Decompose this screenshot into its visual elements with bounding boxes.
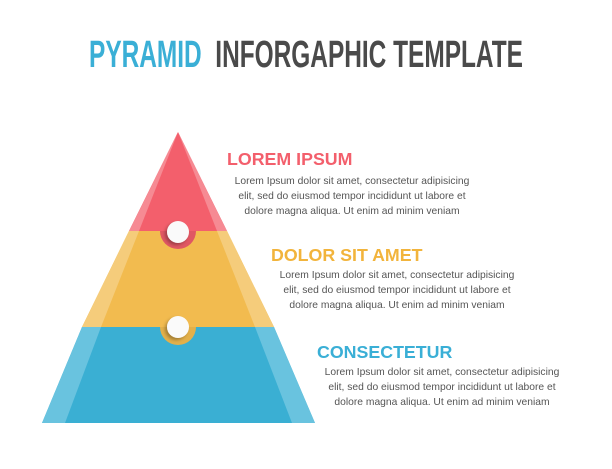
connector: yellow notch	[160, 316, 196, 345]
text block 3: Lorem Ipsum dolor sit amet, consectetur adipisicing	[325, 367, 559, 378]
text block 1: dolore magna aliqua. Ut enim ad minim veniam	[244, 206, 460, 217]
title: PYRAMID INFORGAPHIC TEMPLATE	[89, 34, 523, 76]
text block 3: dolore magna aliqua. Ut enim ad minim veniam	[334, 397, 550, 408]
heading: lorem ipsum: LOREM IPSUM	[227, 149, 352, 169]
text block 2: elit, sed do eiusmod tempor incididunt ut labore et	[283, 285, 511, 296]
text block 3: elit, sed do eiusmod tempor incididunt ut labore et	[328, 382, 556, 393]
text block 2	[280, 270, 514, 311]
layer: yellow middle	[82, 231, 274, 327]
text block 1: elit, sed do eiusmod tempor incididunt ut labore et	[238, 191, 466, 202]
connector: red notch	[160, 221, 196, 249]
text block 3	[325, 367, 559, 408]
text block 1: Lorem Ipsum dolor sit amet, consectetur adipisicing	[235, 176, 469, 187]
text block 1	[235, 176, 469, 217]
heading: consectetur: CONSECTETUR	[317, 342, 452, 362]
layer: red top	[129, 132, 227, 231]
layer: blue bottom	[42, 327, 315, 423]
heading: dolor sit amet: DOLOR SIT AMET	[271, 245, 422, 265]
text block 2: dolore magna aliqua. Ut enim ad minim veniam	[289, 300, 505, 311]
text block 2: Lorem Ipsum dolor sit amet, consectetur adipisicing	[280, 270, 514, 281]
